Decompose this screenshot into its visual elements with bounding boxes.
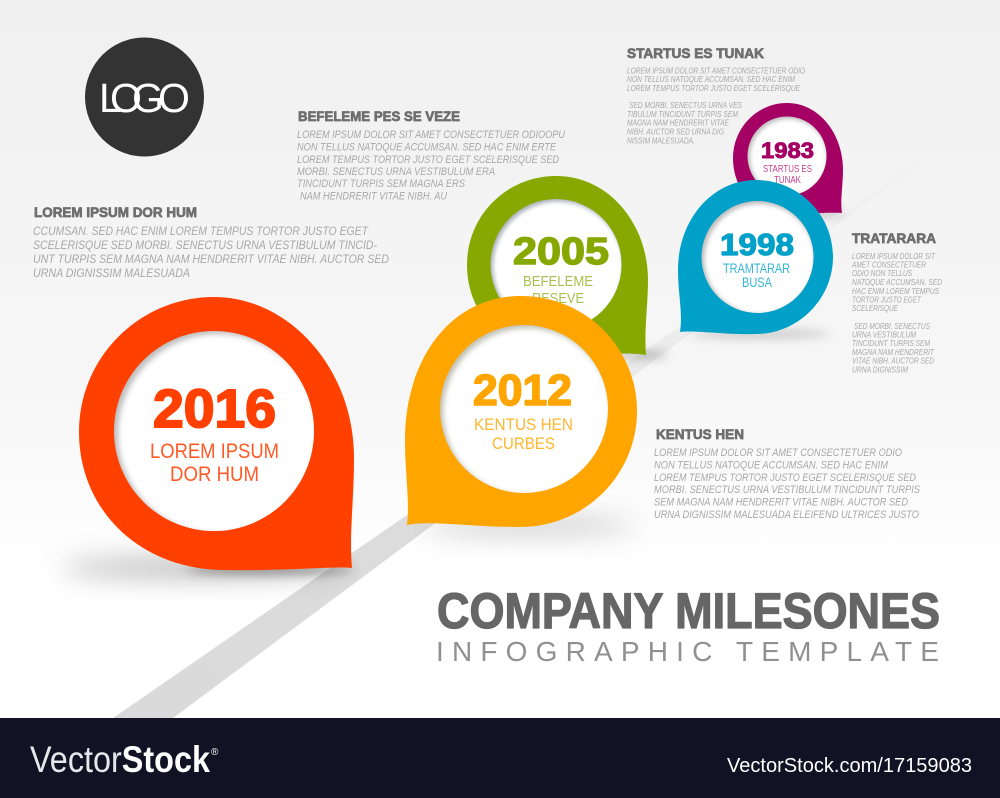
text block: Lorem ipsum dor hum: URNA DIGNISSIM MALESUADA [33, 266, 190, 280]
text block: Tratarara: TORTOR JUSTO EGET [852, 296, 922, 304]
pin: 2012 [405, 296, 637, 533]
text block: Kentus hen: LOREM TEMPUS TORTOR JUSTO EGET SCELERISQUE SED [654, 472, 916, 484]
text block: Lorem ipsum dor hum: CCUMSAN. SED HAC ENIM LOREM TEMPUS TORTOR JUSTO EGET [33, 224, 369, 238]
text block: Befeleme pes se veze: LOREM IPSUM DOLOR SIT AMET CONSECTETUER ODIOOPU [297, 129, 565, 141]
logo [85, 38, 204, 156]
text block: Startus es tunak [627, 46, 805, 145]
text block: Tratarara: MAGNA NAM HENDRERIT [852, 348, 935, 357]
text block: Startus es tunak: NIBH. AUCTOR SED URNA DIG [627, 128, 724, 137]
text block: Startus es tunak: LOREM TEMPUS TORTOR JUSTO EGET SCELERISQUE [627, 84, 801, 93]
text block: Tratarara: HAC ENIM LOREM TEMPUS [852, 287, 940, 296]
text block: Kentus hen [654, 427, 921, 521]
text block: Befeleme pes se veze: LOREM TEMPUS TORTOR JUSTO EGET SCELERISQUE SED [297, 154, 559, 166]
pin: 2012: CURBES [492, 434, 555, 453]
text block: Tratarara: AMET CONSECTETUER [851, 260, 926, 270]
pin: 1998 [678, 180, 833, 338]
text block: Tratarara: URNA VESTIBULUM [852, 330, 916, 340]
pin: 2005: BEFELEME [523, 273, 593, 290]
text block: Tratarara: VITAE NIBH. AUCTOR SED [852, 357, 934, 366]
logo: LOGO [99, 75, 190, 121]
pin: 1998: 1998 [720, 227, 794, 262]
pin: 2016: LOREM IPSUM [150, 440, 279, 463]
text block: Befeleme pes se veze: NON TELLUS NATOQUE ACCUMSAN. SED HAC ENIM ERTE [297, 142, 557, 154]
pin: 1983 [733, 103, 845, 216]
pin: 1998: TRAMTARAR [723, 260, 790, 276]
pin: 2005: RESEVE [532, 290, 584, 307]
text block: Tratarara: SED MORBI. SENECTUS [854, 322, 931, 331]
pin: 2005 [467, 176, 668, 358]
title [436, 583, 940, 667]
text block: Kentus hen: LOREM IPSUM DOLOR SIT AMET CONSECTETUER ODIO [654, 447, 902, 459]
pin: 1983: TUNAK [774, 174, 801, 186]
text block: Startus es tunak: TIBULUM TINCIDUNT TURPIS SEM [627, 110, 738, 119]
text block: Kentus hen: URNA DIGNISSIM MALESUADA ELEIFEND ULTRICES JUSTO [654, 509, 919, 521]
pin: 2016: DOR HUM [170, 463, 259, 486]
pin: 2016: 2016 [153, 379, 276, 439]
text block: Tratarara: LOREM IPSUM DOLOR SIT [852, 252, 936, 261]
title: COMPANY MILESONES [437, 583, 940, 639]
title: INFOGRAPHIC TEMPLATE [436, 636, 939, 667]
footer bar [0, 718, 1000, 798]
text block: Tratarara: TINCIDUNT TURPIS SEM [852, 339, 930, 348]
text block: Tratarara: NATOQUE ACCUMSAN. SED [852, 278, 942, 287]
pin: 1983: STARTUS ES [763, 163, 812, 175]
text block: Befeleme pes se veze: NAM HENDRERIT VITAE NIBH. AU [300, 190, 447, 202]
text block: Befeleme pes se veze: MORBI. SENECTUS URNA VESTIBULUM ERA [297, 166, 495, 178]
text block: Lorem ipsum dor hum [33, 205, 389, 280]
text block: Lorem ipsum dor hum: SCELERISQUE SED MORBI. SENECTUS URNA VESTIBULUM TINCID- [33, 238, 377, 252]
pin: 2005: 2005 [513, 231, 609, 273]
text block: Befeleme pes se veze [297, 109, 565, 202]
pin: 1998: BUSA [742, 274, 773, 290]
text block: Kentus hen: SEM MAGNA NAM HENDRERIT VITAE NIBH. AUCTOR SED [654, 497, 908, 509]
text block: Befeleme pes se veze: BEFELEME PES SE VEZE [298, 109, 460, 124]
pin: 2012: KENTUS HEN [474, 415, 573, 434]
timeline road [113, 147, 942, 718]
text block: Startus es tunak: MAGNA NAM HENDRERIT VITAE [627, 119, 730, 128]
footer logo: ® [211, 747, 219, 758]
text block: Kentus hen: NON TELLUS NATOQUE ACCUMSAN. SED HAC ENIM [654, 460, 889, 472]
text block: Kentus hen: KENTUS HEN [656, 427, 744, 442]
text block: Lorem ipsum dor hum: UNT TURPIS SEM MAGNA NAM HENDRERIT VITAE NIBH. AUCTOR SED [33, 252, 389, 266]
text block: Kentus hen: MORBI. SENECTUS URNA VESTIBULUM TINCIDUNT TURPIS [654, 484, 921, 496]
pin: 2012: 2012 [473, 366, 572, 415]
text block: Lorem ipsum dor hum: LOREM IPSUM DOR HUM [34, 205, 197, 220]
text block: Startus es tunak: STARTUS ES TUNAK [627, 46, 764, 61]
pin: 1983: 1983 [761, 138, 814, 163]
text block: Startus es tunak: SED MORBI. SENECTUS URNA VES [629, 101, 743, 110]
text block: Tratarara: ODIO NON TELLUS [852, 269, 913, 278]
text block: Startus es tunak: NISSIM MALESUADA. [627, 136, 695, 145]
text block: Tratarara: URNA DIGNISSIM [852, 366, 908, 375]
text block: Tratarara: TRATARARA [852, 231, 936, 246]
text block: Startus es tunak: LOREM IPSUM DOLOR SIT AMET CONSECTETUER ODIO [627, 66, 805, 76]
text block: Befeleme pes se veze: TINCIDUNT TURPIS SEM MAGNA ERS [297, 178, 466, 190]
text block: Tratarara [851, 231, 942, 375]
text block: Tratarara: SCELERISQUE [852, 304, 899, 313]
pin: 2016 [60, 297, 355, 577]
text block: Startus es tunak: NON TELLUS NATOQUE ACCUMSAN. SED HAC ENIM [627, 75, 795, 84]
footer logo: VectorStock [30, 739, 210, 780]
footer url: VectorStock.com/17159083 [727, 754, 972, 777]
